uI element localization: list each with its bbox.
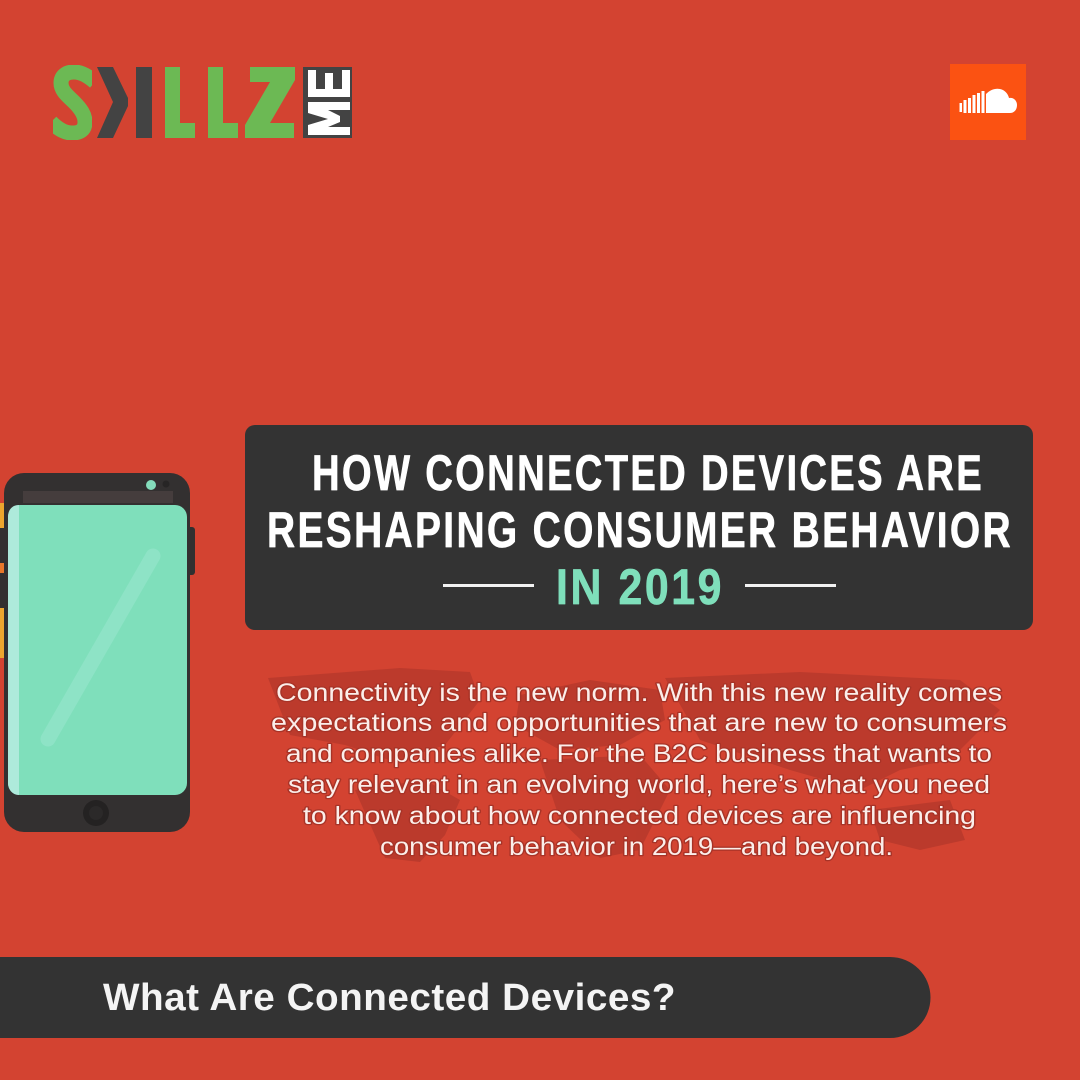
logo letter S <box>51 72 95 133</box>
phone home button <box>83 800 109 826</box>
icon: smartphone <box>0 473 195 832</box>
logo letter I <box>136 67 152 138</box>
logo second letter L <box>208 67 238 138</box>
subtitle year: IN 2019 <box>556 559 724 615</box>
left rule <box>443 584 534 587</box>
phone sensor <box>162 480 170 488</box>
section heading: What Are Connected Devices? <box>103 977 676 1019</box>
phone screen <box>8 505 187 795</box>
logo chevron K <box>97 67 128 138</box>
intro paragraph: to know about how connected devices are influencing <box>303 802 976 830</box>
phone side button <box>186 527 195 575</box>
logo ME badge <box>303 67 352 138</box>
right rule <box>745 584 836 587</box>
phone speaker bar <box>23 491 173 503</box>
intro paragraph: consumer behavior in 2019—and beyond. <box>380 833 893 861</box>
section banner <box>0 957 930 1038</box>
world map smudge behind text <box>268 668 1000 862</box>
icon: SoundCloud <box>950 64 1026 140</box>
intro paragraph: Connectivity is the new norm. With this new reality comes <box>276 679 1002 707</box>
intro paragraph <box>271 679 1007 861</box>
logo: Skillz Me <box>51 67 352 138</box>
logo letter Z <box>245 67 295 138</box>
phone screen left highlight <box>8 505 19 795</box>
intro paragraph: stay relevant in an evolving world, here’s what you need <box>288 771 990 799</box>
title panel <box>245 425 1033 630</box>
logo letter L <box>165 67 195 138</box>
phone left edge accents <box>0 503 4 658</box>
phone screen diagonal glare <box>48 556 153 739</box>
intro paragraph: and companies alike. For the B2C business that wants to <box>286 740 992 768</box>
phone camera <box>146 480 156 490</box>
intro paragraph: expectations and opportunities that are new to consumers <box>271 709 1007 737</box>
phone body <box>4 473 190 832</box>
